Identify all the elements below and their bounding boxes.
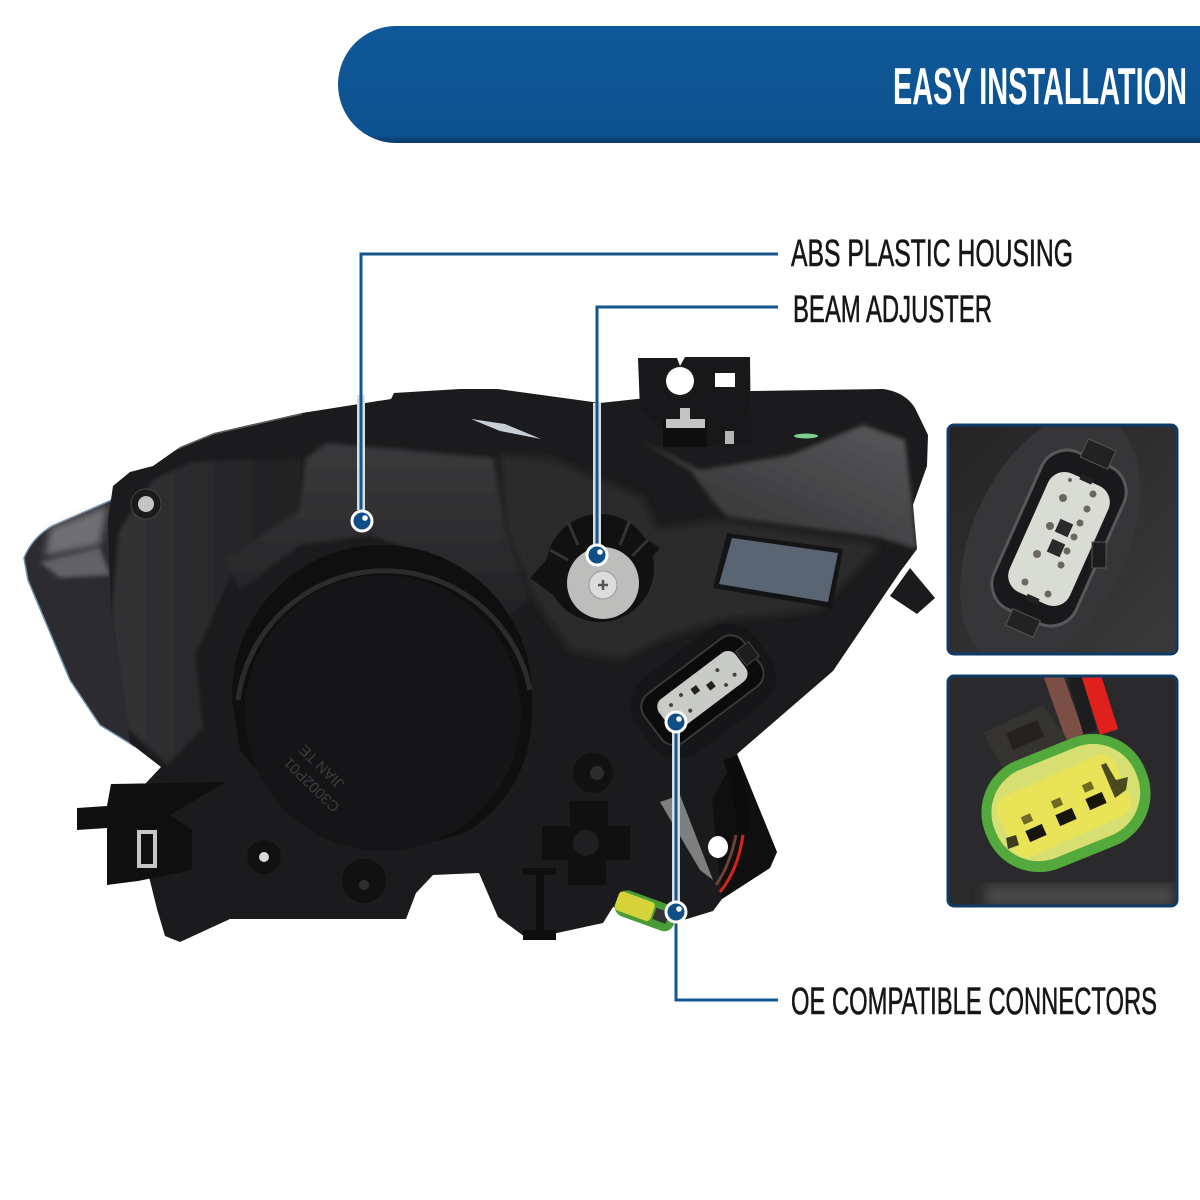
callout: beam adjuster: BEAM ADJUSTER bbox=[793, 289, 992, 331]
top highlight bbox=[471, 419, 541, 439]
T post bbox=[523, 868, 556, 940]
header banner bbox=[338, 26, 1200, 143]
wire loom bbox=[660, 758, 743, 892]
lens cap bbox=[232, 545, 532, 851]
inspection window bbox=[713, 533, 843, 608]
small connector bbox=[612, 888, 680, 934]
cap moulded text: JIAN TE bbox=[296, 741, 348, 792]
top mounting tab bbox=[638, 357, 751, 447]
cross key bbox=[542, 801, 630, 885]
green mark bbox=[794, 434, 818, 438]
socket bbox=[616, 610, 790, 772]
housing body bbox=[108, 389, 928, 942]
soft shading bbox=[111, 413, 917, 899]
beam adjuster bbox=[530, 514, 660, 622]
cap moulded text bbox=[280, 739, 357, 815]
rear plate bbox=[712, 754, 777, 899]
top-left screw bbox=[131, 489, 161, 519]
lower pin bbox=[247, 840, 281, 874]
inset panel: socket detail bbox=[946, 424, 1178, 656]
callout: abs plastic housing bbox=[352, 233, 1073, 531]
rim highlight bbox=[172, 413, 302, 452]
callout: oe compatible connectors bbox=[666, 712, 1157, 1023]
left lobe bbox=[111, 460, 272, 764]
callout: beam adjuster bbox=[587, 289, 992, 565]
left bracket bbox=[77, 782, 226, 885]
cap moulded text: C3002P01 bbox=[280, 754, 343, 815]
middle body bbox=[500, 455, 880, 660]
side tab bbox=[890, 568, 935, 614]
lower plug bbox=[342, 859, 386, 903]
upper right surface bbox=[640, 425, 917, 549]
mounting plug bbox=[573, 753, 613, 793]
headlight photo bbox=[24, 357, 935, 942]
inset panel: connector detail bbox=[948, 675, 1177, 907]
lens bbox=[24, 500, 150, 746]
upper centre panel bbox=[225, 443, 530, 620]
